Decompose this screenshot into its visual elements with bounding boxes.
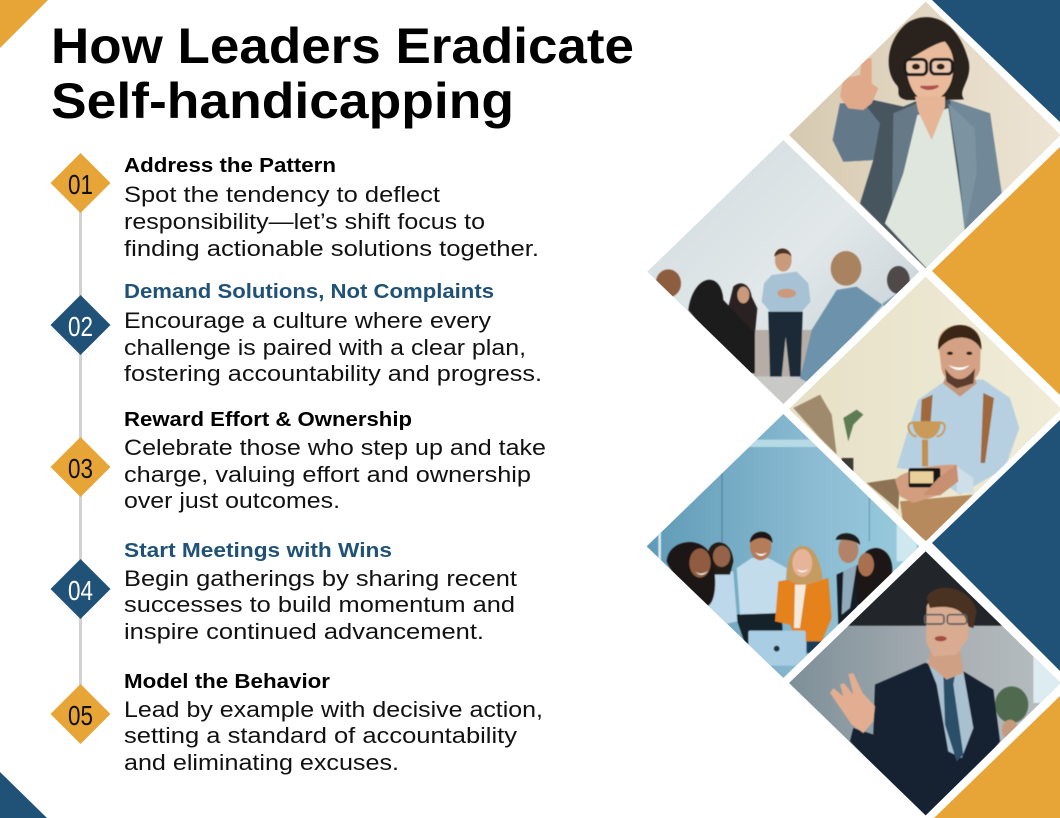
step 5 [50, 671, 543, 775]
body 3: Celebrate those who step up and take [124, 435, 546, 460]
body 2: Encourage a culture where every [124, 308, 491, 333]
corner triangle: bottom-left blue [0, 772, 47, 818]
body 2: challenge is paired with a clear plan, [124, 335, 526, 360]
badge 03: 03 [68, 453, 93, 484]
body 5: Lead by example with decisive action, [124, 697, 543, 722]
photo: presenter in dark suit gesturing [787, 550, 1060, 818]
body 3 [124, 435, 546, 513]
badge 03 [50, 437, 110, 497]
badge 04: 04 [68, 575, 93, 606]
timeline connector [79, 183, 82, 714]
body 3: charge, valuing effort and ownership [124, 462, 531, 487]
badge 05: 05 [68, 700, 93, 731]
body 5: and eliminating excuses. [124, 750, 399, 775]
body 5: setting a standard of accountability [124, 723, 517, 748]
heading 5: Model the Behavior [124, 671, 330, 693]
body 3: over just outcomes. [124, 488, 340, 513]
colour block: top blue [932, 0, 1060, 122]
body 4: inspire continued advancement. [124, 619, 484, 644]
step 1 [50, 153, 539, 261]
title [51, 18, 634, 129]
step 4 [50, 540, 517, 644]
heading 3: Reward Effort & Ownership [124, 409, 412, 431]
heading 4: Start Meetings with Wins [124, 540, 392, 562]
body 2: fostering accountability and progress. [124, 361, 542, 386]
photo: man receiving a trophy [787, 275, 1060, 545]
badge 01 [50, 153, 110, 213]
title: Self-handicapping [51, 73, 514, 129]
colour block: lower blue [932, 420, 1060, 671]
colour block: upper orange [932, 147, 1060, 395]
photo: manager speaking to seated team [647, 138, 920, 407]
photo: smiling diverse team around a laptop [647, 411, 920, 681]
photo: woman in blazer pointing with thumb up [787, 0, 1060, 270]
badge 02: 02 [68, 311, 93, 342]
body 4 [124, 566, 517, 644]
badge 05 [50, 684, 110, 744]
body 1 [124, 182, 539, 261]
step 3 [50, 409, 546, 513]
title: How Leaders Eradicate [51, 18, 634, 74]
badge 02 [50, 295, 110, 355]
step 2 [50, 281, 542, 386]
body 4: successes to build momentum and [124, 592, 515, 617]
badge 04 [50, 559, 110, 619]
body 1: Spot the tendency to deflect [124, 182, 440, 207]
heading 1: Address the Pattern [124, 155, 336, 177]
body 4: Begin gatherings by sharing recent [124, 566, 517, 591]
body 1: responsibility—let’s shift focus to [124, 209, 485, 234]
badge 01: 01 [68, 169, 93, 200]
corner triangle: top-left orange [0, 0, 48, 48]
body 2 [124, 308, 542, 386]
heading 2: Demand Solutions, Not Complaints [124, 281, 494, 303]
body 5 [124, 697, 543, 775]
colour block: bottom orange [934, 696, 1060, 818]
body 1: finding actionable solutions together. [124, 236, 539, 261]
